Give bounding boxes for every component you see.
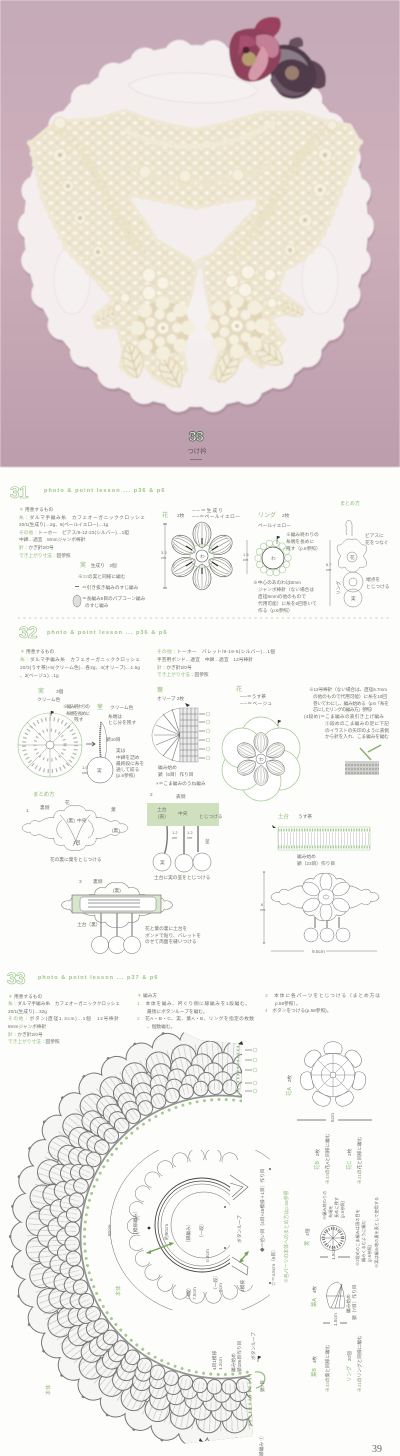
section 31 materials: でき上がり寸法：図参照 bbox=[19, 552, 71, 559]
section 31 heading: 31 bbox=[10, 483, 28, 502]
notes 32: 巻いてわにし、編み始める（p.6「糸を bbox=[313, 700, 389, 707]
assembly step 3: 3 bbox=[79, 879, 82, 884]
flower B note: 花B 2枚 bbox=[313, 1149, 321, 1170]
chart row labels: 縁編み ① bbox=[258, 1436, 265, 1456]
inner schematic of the collar bbox=[108, 1150, 276, 1310]
section 31 heading: photo & point lesson ... p36 & p6 bbox=[44, 488, 165, 494]
assembly step 3: 土台（裏） bbox=[77, 921, 100, 928]
assembly step 3: のせて両面を縫いつける bbox=[145, 938, 197, 945]
assembly step 2: cm bbox=[172, 835, 178, 840]
section 33 steps: 2 花A・B・C、実、葉A・B、リングを指定の枚数 bbox=[137, 1015, 254, 1022]
leaf B note bbox=[310, 1344, 331, 1392]
section 32 heading: photo & point lesson ... p36 & p6 bbox=[47, 630, 167, 636]
assembly step 2: 茎 bbox=[205, 838, 210, 844]
stem diagram 32: とじ分を残す bbox=[108, 719, 136, 726]
flower diagram 31: 3.3 bbox=[161, 550, 167, 555]
assembly step 1: まとめ方 bbox=[33, 790, 55, 798]
leaf diagram 32: オリーブ 2枚 bbox=[157, 695, 184, 702]
leaf diagram 32: 編み始め bbox=[158, 764, 177, 771]
section 31 materials: 中綿…適宜 8mmジャンボ棒針 bbox=[19, 536, 86, 543]
section 33 steps: p.58参照）。 bbox=[275, 1000, 301, 1007]
stem diagram 32: 茎 bbox=[97, 703, 103, 711]
earring assembly 31: 6.7 bbox=[326, 562, 332, 567]
collar flowers and leaves bbox=[95, 305, 122, 326]
section 31 materials: 糸：ダルマ手編み糸 カフェオーガニッククロッシェ bbox=[19, 514, 145, 521]
berry diagram 32: 実 bbox=[38, 687, 44, 695]
assembly step 3 bbox=[61, 878, 201, 954]
ring diagram 31: 代用可能）に糸を6回巻いて bbox=[258, 600, 317, 607]
chart row labels: 本体 bbox=[44, 1384, 52, 1395]
assembly step 2: とじつける bbox=[199, 814, 222, 820]
leaf A diagram: 編み始め bbox=[345, 1294, 352, 1313]
earring assembly 31: 端点を bbox=[366, 576, 380, 583]
leaf A diagram bbox=[310, 1282, 358, 1326]
earring assembly 31: 花 bbox=[350, 554, 355, 561]
ring diagram 31: 直径8mmの他のもので bbox=[258, 593, 306, 600]
stem diagram 32: 1.5 bbox=[82, 765, 88, 770]
assembly step 2: 1.2 bbox=[187, 830, 193, 835]
section 32 materials right bbox=[157, 648, 275, 678]
flower A diagram: 花A 2枚 bbox=[285, 1075, 293, 1096]
ring diagram 31: 作る（p.6参照） bbox=[258, 607, 293, 614]
leaf A diagram: 鎖（7目）作り目 bbox=[351, 1285, 358, 1320]
inner schematic of the collar: （4段） bbox=[185, 1285, 192, 1302]
photo caption: つけ衿 bbox=[187, 446, 207, 455]
assembly step 1: (裏) bbox=[67, 817, 75, 824]
photo caption: 33 bbox=[189, 428, 204, 444]
chart row labels bbox=[44, 1041, 266, 1456]
assembly step 2: 2 bbox=[150, 792, 153, 797]
section 32 materials right: でき上がり寸法：図参照 bbox=[157, 671, 209, 678]
inner schematic of the collar: 4模様 bbox=[239, 1280, 246, 1292]
stem diagram 32: 糸端は bbox=[108, 713, 122, 720]
doily shadow bbox=[25, 48, 369, 410]
section 32 materials left: 糸：ダルマ手編み糸 カフェオーガニッククロッシェ bbox=[20, 656, 140, 663]
photo: crocheted collar on a doily bbox=[0, 0, 400, 467]
section 33 heading: 33 bbox=[7, 969, 25, 988]
flower diagram 32: ──＝ベージュ bbox=[239, 701, 272, 706]
finished barrette diagram: 9.5cm bbox=[312, 949, 325, 954]
notes 32: 芯にしたリングの編み方」参照） bbox=[313, 706, 375, 713]
flower A diagram: 6cm bbox=[330, 1113, 335, 1122]
berry diagram 32 bbox=[18, 687, 95, 777]
section 32 materials right: 針：かぎ針2/0号 bbox=[157, 664, 192, 671]
earring assembly 31: まとめ方 bbox=[340, 500, 360, 507]
section 33 materials: でき上がり寸法：図参照 bbox=[8, 1038, 60, 1045]
berry diagram 32: 3個 bbox=[56, 688, 64, 695]
section 31 materials: 20/1(生成り)…2g、6(ペールイエロー)…1g bbox=[19, 521, 109, 528]
assembly step 1: 裏側 bbox=[40, 804, 50, 811]
assembly step 3: 裏側 bbox=[93, 878, 103, 885]
assembly step 2: cm bbox=[187, 835, 193, 840]
notes 32: から針を入れ、こま編みを編む bbox=[325, 733, 389, 740]
ring diagram 31: cm bbox=[243, 557, 249, 562]
assembly step 3: ボンドで貼り、バレットを bbox=[145, 932, 201, 939]
base diagram: 鎖（23目）作り目 bbox=[297, 860, 335, 867]
assembly step 2: 1.2 bbox=[172, 830, 178, 835]
collar bbox=[30, 110, 360, 392]
ring diagram 31: わ bbox=[271, 555, 276, 561]
section 31 heading bbox=[10, 483, 165, 502]
inner schematic of the collar: ◆＝拾い目（4目×46模様＋1目）作り目 bbox=[259, 1169, 266, 1252]
section 32 heading bbox=[19, 623, 167, 642]
finished barrette diagram bbox=[260, 872, 379, 954]
assembly step 2: 表側 bbox=[176, 793, 186, 800]
assembly step 2 bbox=[147, 792, 222, 881]
section 33 steps: ＊ 編み方 bbox=[137, 992, 157, 999]
base diagram: 編み始め bbox=[297, 853, 316, 860]
swatch illustration bbox=[345, 745, 381, 775]
section 32 materials left: 、2(ベージュ)…1g bbox=[20, 673, 59, 678]
flower diagram 32: 花 bbox=[236, 685, 242, 693]
section 33 steps: 最後にボタンループを編む。 bbox=[147, 1008, 208, 1015]
berry diagram 33: 1.5cm bbox=[331, 1247, 336, 1260]
finished barrette diagram: cm bbox=[260, 907, 266, 912]
inner schematic of the collar: 3cm bbox=[218, 1283, 223, 1292]
stem diagram 32: cm bbox=[82, 770, 88, 775]
assembly step 2: (表) bbox=[158, 813, 166, 820]
berry note 31: ＝引き抜き編みのすじ編み bbox=[82, 584, 139, 591]
inner schematic of the collar: 7.5cm bbox=[192, 1287, 197, 1300]
leaf diagram 32: 鎖（6目）作り目 bbox=[158, 771, 193, 778]
section 33 materials: 糸：ダルマ手編み糸 カフェオーガニッククロッシェ bbox=[8, 1000, 120, 1007]
inner schematic of the collar: 0.8cm bbox=[205, 1249, 210, 1262]
berry diagram 33: ※編み終わりの bbox=[321, 1191, 328, 1220]
stem diagram 32: (p.6参照) bbox=[116, 772, 135, 779]
flower corsage bbox=[229, 17, 326, 99]
flower diagram 32: ──＝うす茶 bbox=[239, 693, 266, 700]
ring diagram 31: ※編み終わりの bbox=[286, 531, 319, 538]
inner schematic of the collar: （一段） bbox=[198, 1221, 205, 1240]
notes 32: (4段め)＝こま編みの表引き上げ編み bbox=[304, 713, 384, 720]
section 33 materials: 8mmジャンボ棒針 bbox=[8, 1023, 47, 1030]
leaf A diagram: 葉A 4枚 bbox=[310, 1286, 318, 1307]
flower diagram 31: 2枚 bbox=[177, 512, 185, 519]
earring assembly 31 bbox=[326, 500, 389, 607]
earring assembly 31: リング bbox=[335, 581, 342, 595]
section 33 steps: 3 本体に各パーツをとじつける（まとめ方は bbox=[265, 992, 380, 999]
berry diagram 33: ※実は編み地の裏を表として使用する bbox=[373, 1197, 380, 1268]
berry note 31: のすじ編み bbox=[85, 602, 109, 609]
section 32 materials left bbox=[20, 648, 140, 678]
berry diagram 33: ※2段めのこま編みは頭の目を bbox=[354, 1209, 361, 1266]
finished barrette diagram: 6 bbox=[261, 902, 264, 907]
leaf diagram 32: 葉 bbox=[157, 686, 163, 694]
berry diagram 33: (p.6参照) bbox=[366, 1244, 373, 1262]
berry note 31: ＝長編み5目のパプコーン編み bbox=[82, 595, 146, 602]
chart row labels: ボタンループ bbox=[250, 1332, 257, 1360]
berry diagram 32: ※編み終わりの bbox=[63, 703, 90, 710]
photo caption bbox=[187, 428, 207, 460]
flower diagram 31: cm bbox=[161, 555, 167, 560]
berry note 31 bbox=[73, 561, 146, 609]
stem diagram 32: クリーム色 bbox=[110, 704, 134, 711]
inner schematic of the collar: ☆＝4.5cm（6目） bbox=[270, 1247, 277, 1286]
notes 32: ③段めのこま編みの足に下記 bbox=[325, 720, 389, 727]
assembly step 1: 中央 bbox=[77, 817, 87, 824]
leaf diagram 32 bbox=[152, 686, 210, 787]
inner schematic of the collar: （縁編み） bbox=[185, 1222, 192, 1245]
section 33 steps: 4 ボタンをつける(p.58参照)。 bbox=[265, 1007, 331, 1014]
assembly step 2: 土台 bbox=[157, 806, 167, 813]
section 32 materials right: その他：トーホー バレット/9-19-5(シルバー)…1個 bbox=[157, 648, 275, 655]
assembly step 1: 1 bbox=[26, 808, 29, 813]
inner schematic of the collar: ボタンループ bbox=[236, 1215, 243, 1243]
section 31 materials: その他：トーホー ピアス/9-12-23(シルバー)…1組 bbox=[19, 529, 129, 536]
section 33 materials: その他：ボタン(直径1.3cm)…1個 12号棒針 bbox=[8, 1015, 119, 1022]
leaf B note: ※33の葉と同様に編む bbox=[324, 1344, 331, 1392]
assembly step 1: 花の裏に葉をとじつける bbox=[50, 856, 102, 863]
berry diagram 33 bbox=[303, 1191, 380, 1268]
assembly step 1 bbox=[22, 790, 128, 863]
ring diagram 31 bbox=[243, 511, 321, 614]
section 33 heading bbox=[7, 969, 158, 988]
section 32 heading: 32 bbox=[19, 623, 37, 642]
inner schematic of the collar: 約90cm bbox=[163, 1224, 170, 1240]
flower diagram 31: ──＝ペールイエロー bbox=[191, 514, 240, 519]
section 32 materials left: ＊ 用意するもの bbox=[20, 648, 54, 655]
base diagram: うす茶 bbox=[298, 813, 312, 820]
chart row labels: 編み始め bbox=[230, 1353, 237, 1372]
section 33 materials: 針：かぎ針2/0号 bbox=[8, 1031, 43, 1038]
leaf B note: 葉B 4枚 bbox=[310, 1356, 318, 1377]
ring diagram 31: 糸端を長めに bbox=[286, 538, 314, 545]
inner schematic of the collar: （一段） bbox=[212, 1273, 219, 1292]
assembly step 1: 葉 bbox=[111, 806, 116, 813]
berry diagram 33: (p.6参照) bbox=[339, 1200, 346, 1218]
dotted divider bbox=[18, 617, 392, 619]
assembly step 1: (裏) bbox=[112, 827, 120, 834]
section 33 steps bbox=[137, 992, 380, 1030]
section 33 materials: 20/1(生成り)…32g bbox=[8, 1008, 47, 1015]
stem diagram 32: 中綿を詰め bbox=[116, 754, 140, 761]
berry diagram 33: 編みくるむように編む bbox=[360, 1220, 367, 1262]
ring note bbox=[345, 1335, 363, 1392]
section 33 steps: 1 本体を編み、衿ぐり側に縁編みを1段編む。 bbox=[137, 1000, 250, 1007]
flower B note: ※33の花Aと同様に編む bbox=[324, 1133, 331, 1184]
berry note 31: ※32の実と同様に編む bbox=[78, 573, 126, 580]
ring diagram 31: ※中心のあのわは8mm bbox=[253, 579, 301, 586]
notes 32: ※12号棒針（ない場合は、直径6.7mm bbox=[309, 686, 387, 693]
assembly step 1: 1回 bbox=[73, 840, 81, 846]
earring assembly 31: cm bbox=[326, 567, 332, 572]
doily bbox=[24, 45, 368, 407]
ring diagram 31: ジャンボ棒針（ない場合は bbox=[258, 586, 314, 593]
section 31 materials: 針：かぎ針2/0号 bbox=[19, 544, 54, 551]
ring diagram 31: リング bbox=[258, 511, 276, 519]
flower diagram 32: わ bbox=[259, 756, 264, 762]
notes 32: の他のもので代用可能）に糸を10回 bbox=[313, 693, 387, 700]
section 33 steps: 、個数編む。 bbox=[147, 1023, 175, 1030]
leaf A diagram: 1.5cm bbox=[333, 1313, 338, 1326]
ring note: ※31のリングと同様に編む bbox=[356, 1335, 363, 1392]
stem diagram 32 bbox=[82, 703, 144, 783]
assembly step 3: 花と葉の裏に土台を bbox=[145, 925, 188, 932]
earring assembly 31: ピアスに bbox=[365, 533, 384, 539]
assembly step 2: 中央 bbox=[178, 810, 188, 817]
stem diagram 32: 実 bbox=[97, 767, 102, 774]
notes 32: のイラストの矢印のように表側 bbox=[325, 727, 389, 734]
main collar chart bbox=[8, 1032, 253, 1444]
section 33 heading: photo & point lesson ... p37 & p6 bbox=[38, 975, 158, 981]
ring diagram 31: 残す（p.6参照） bbox=[286, 545, 321, 552]
flower C note: ※31の花と同様に編む bbox=[356, 1136, 363, 1184]
berry diagram 33: 糸端を bbox=[327, 1205, 334, 1218]
berry diagram 33: 長めに残す bbox=[333, 1197, 340, 1218]
section 32 materials left: 20/3(うす茶)+5(クリーム色)…各2g、4(オリーブ)…1.5g bbox=[20, 664, 140, 671]
ring diagram 31: 2枚 bbox=[282, 512, 290, 519]
berry diagram 32: 糸端を長めに bbox=[66, 710, 90, 717]
ring note: リング 20個 bbox=[345, 1351, 353, 1382]
flower diagram 31: ──＝生成り bbox=[191, 507, 223, 514]
earring assembly 31: 花をつなぐ bbox=[365, 539, 388, 546]
section 31 materials: ＊ 用意するもの bbox=[19, 506, 53, 513]
berry diagram 32: 残す bbox=[74, 716, 84, 723]
flower diagram 31 bbox=[161, 507, 240, 590]
flower B note bbox=[313, 1133, 331, 1184]
flower diagram 31: 花 bbox=[162, 511, 168, 519]
assembly step 2: 実 bbox=[160, 859, 165, 866]
inner schematic of the collar: 80cm bbox=[107, 1224, 112, 1236]
section 31 materials bbox=[19, 506, 145, 559]
chart row labels: 鎖186目作り目 bbox=[236, 1341, 243, 1372]
earring assembly 31: とじつける bbox=[366, 584, 389, 590]
section 32 materials right: 手芸用ボンド…適宜 中綿…適宜 12号棒針 bbox=[157, 656, 253, 663]
flower diagram 31: わ bbox=[200, 553, 205, 559]
stem diagram 32: 最終段に糸を bbox=[116, 760, 144, 767]
stem diagram 32: 通して絞る bbox=[116, 766, 139, 773]
flower diagram 32 bbox=[222, 685, 300, 801]
assembly step 2: 土台に実の茎をとじつける bbox=[154, 874, 210, 881]
ring diagram 31: 1.5 bbox=[243, 552, 249, 557]
section 33 materials bbox=[8, 993, 120, 1045]
assembly step 3: (裏) bbox=[113, 887, 121, 894]
notes 32 bbox=[304, 686, 389, 740]
section 33 materials: ＊ 用意するもの bbox=[8, 993, 42, 1000]
berry diagram 33: 実 4個 bbox=[303, 1228, 311, 1246]
stem diagram 32: 実は bbox=[116, 747, 126, 754]
berry diagram 32: クリーム色 bbox=[37, 696, 61, 703]
flower C note bbox=[345, 1136, 363, 1184]
assembly step 1: 花 bbox=[65, 799, 70, 806]
base diagram bbox=[272, 812, 370, 867]
chart row labels: 1.2cm bbox=[218, 1357, 223, 1370]
chart row labels: 鎖7目 bbox=[259, 1380, 266, 1392]
berry note 31: 実 生成り 2個 bbox=[80, 561, 117, 569]
earring assembly 31: 実 bbox=[351, 595, 356, 602]
inner schematic of the collar: 本体 bbox=[114, 1285, 122, 1296]
page number: 39 bbox=[372, 1444, 382, 1455]
base diagram: 土台 bbox=[278, 812, 289, 820]
flower C note: 花C 2枚 bbox=[345, 1148, 353, 1170]
ring diagram 31: ペールイエロー bbox=[258, 523, 291, 528]
stem diagram 32: 鎖10目 bbox=[106, 736, 121, 743]
inner schematic of the collar: （模様編み） bbox=[132, 1209, 139, 1237]
leaf diagram 32: ×＝こま編みのうね編み bbox=[156, 780, 206, 787]
note: parts assembly: ※各パーツの本体へのまとめ方はp.58参照 bbox=[283, 1190, 290, 1283]
chart row labels: 4目1模様 bbox=[211, 1350, 218, 1370]
flower A diagram bbox=[285, 1042, 372, 1122]
